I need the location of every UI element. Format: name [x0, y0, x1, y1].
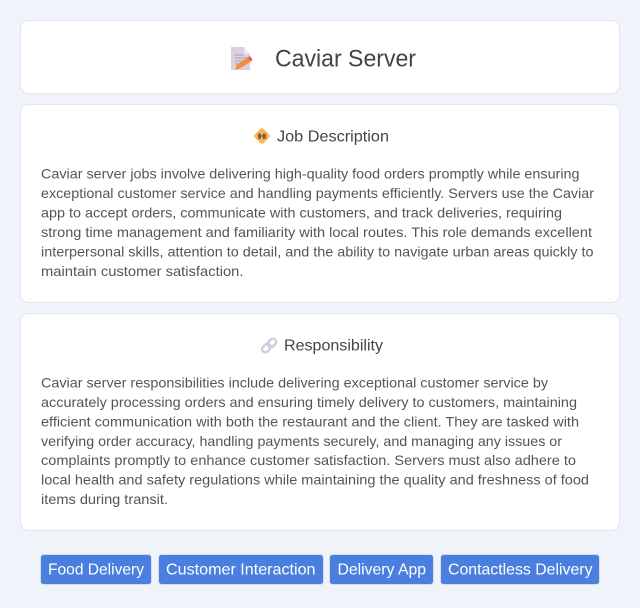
text block: responsibility: accurately processing orders and ensuring timely delivery to customers, maintaining [41, 394, 577, 410]
text block: job description: exceptional customer service and handling payments efficiently. Servers use the Caviar [41, 185, 594, 201]
icon: document with pencil [231, 47, 252, 70]
icon: diamond road sign [253, 127, 271, 145]
icon: chain link [261, 337, 278, 354]
text block: responsibility: efficient communication with both the restaurant and the client. They are tasked with [41, 414, 579, 430]
tag: delivery app: Delivery App [338, 562, 426, 579]
text block: responsibility: verifying order accuracy, handling payments securely, and managing any issues or [41, 433, 562, 449]
text block: job description: app to accept orders, communicate with customers, and track deliveries, requiring [41, 205, 562, 221]
text block: job description: Caviar server jobs involve delivering high-quality food orders promptly while ensuring [41, 166, 580, 182]
text block: responsibility: Caviar server responsibilities include delivering exceptional customer service by [41, 375, 548, 391]
panel: responsibility [20, 314, 620, 530]
text block: responsibility [41, 375, 589, 507]
text block: job description: strong time management and familiarity with local routes. This role demands excellent [41, 224, 592, 240]
title: Caviar Server [275, 46, 416, 72]
text block: responsibility: items during transit. [41, 491, 168, 507]
tag: contactless delivery: Contactless Delivery [448, 562, 592, 579]
panel: job description [20, 104, 620, 302]
text block: job description: interpersonal skills, attention to detail, and the ability to navigate urban areas quickly to [41, 244, 594, 260]
tag: customer interaction [158, 554, 324, 584]
panel: header [20, 20, 620, 94]
heading: responsibility: Responsibility [284, 338, 383, 355]
tag: food delivery [40, 554, 152, 584]
heading: job description: Job Description [277, 129, 389, 146]
text block: job description: maintain customer satisfaction. [41, 263, 244, 279]
text block: responsibility: complaints promptly to enhance customer satisfaction. Servers must also adhere to [41, 452, 576, 468]
tag: food delivery: Food Delivery [48, 562, 144, 579]
tag: delivery app [330, 554, 434, 584]
text block: job description [41, 166, 594, 279]
text block: responsibility: local health and safety regulations while maintaining the quality and freshness of food [41, 472, 589, 488]
tag: contactless delivery [440, 554, 600, 584]
tag: customer interaction: Customer Interaction [166, 562, 316, 579]
